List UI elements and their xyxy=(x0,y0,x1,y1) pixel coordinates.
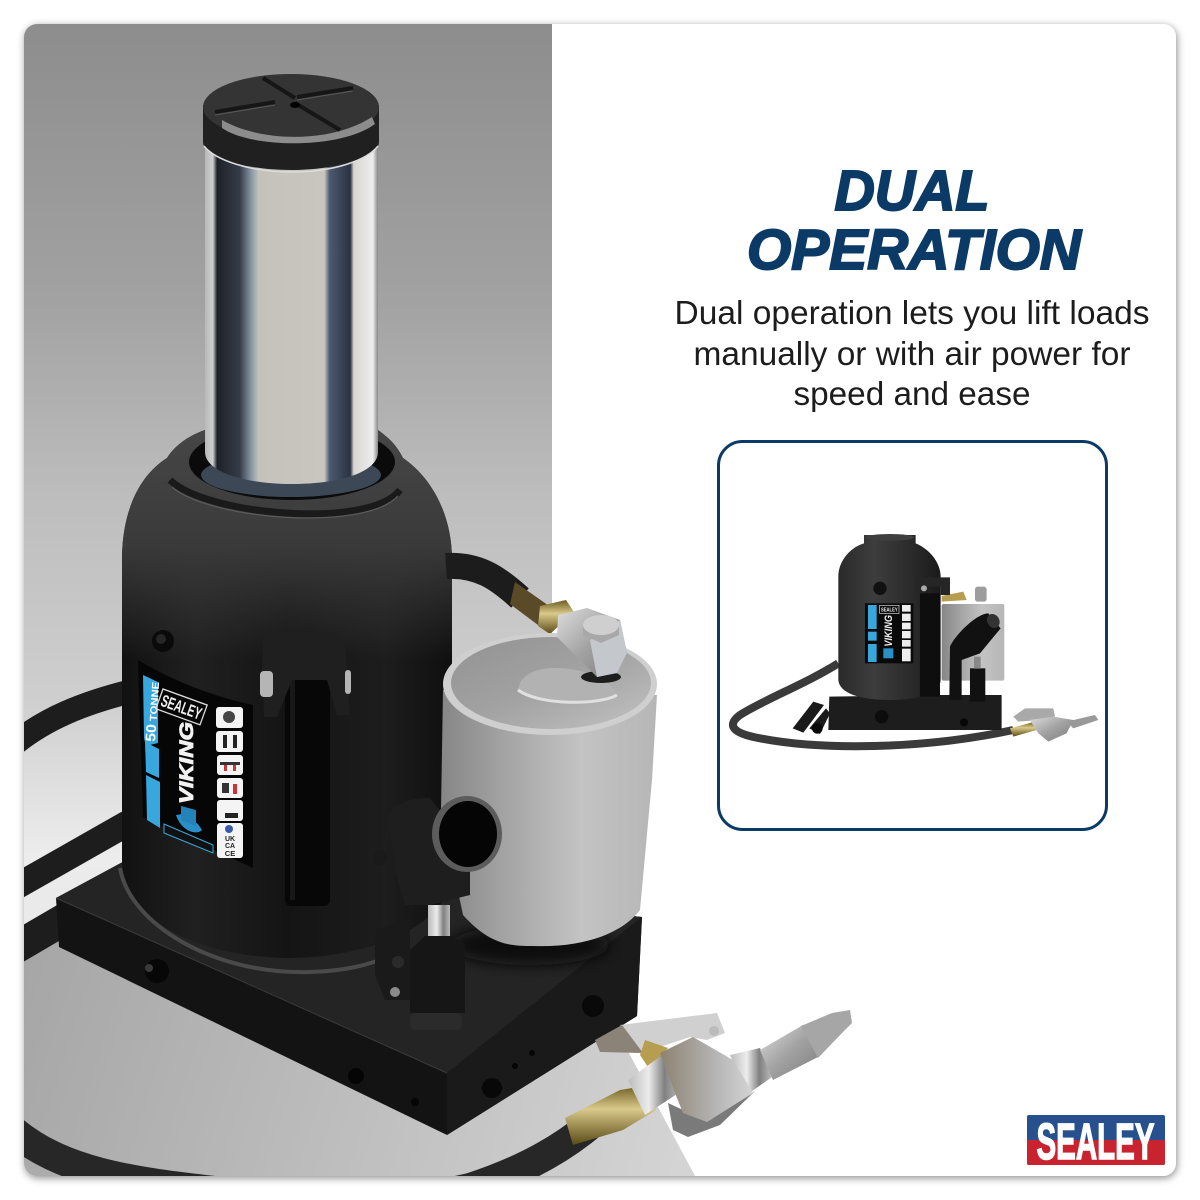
inset panel xyxy=(718,442,1106,830)
Sealey label badge: SEALEY xyxy=(158,691,205,724)
capacity text: 50 TONNE xyxy=(142,681,162,742)
inset top fitting xyxy=(942,587,987,602)
inset spare handle tubes xyxy=(793,702,830,734)
inset side handle socket xyxy=(917,577,950,697)
product label xyxy=(138,660,253,868)
handle socket xyxy=(260,632,351,906)
top hose and fittings xyxy=(446,566,574,634)
Sealey label badge xyxy=(156,689,207,725)
chrome ram xyxy=(205,140,378,484)
description text: manually or with air power for xyxy=(694,335,1131,372)
approval banner xyxy=(164,824,213,853)
Viking label text: VIKING xyxy=(177,722,198,804)
description text: Dual operation lets you lift loads xyxy=(674,294,1150,331)
viking ship icon xyxy=(176,806,202,832)
air hose behind jack xyxy=(12,692,128,950)
bottom air hose xyxy=(24,1120,599,1176)
saddle cap xyxy=(203,74,379,172)
pump assembly xyxy=(373,796,502,1030)
jack main body xyxy=(120,424,452,972)
label icons xyxy=(216,707,243,858)
product label: CA xyxy=(225,843,235,850)
blue capacity pills xyxy=(143,675,160,828)
inset tank xyxy=(942,604,1004,681)
inset label xyxy=(865,603,913,663)
floor xyxy=(24,941,695,1176)
description text xyxy=(674,294,1150,412)
inset air gun xyxy=(1010,708,1098,742)
heading: OPERATION xyxy=(747,218,1083,282)
inset pump xyxy=(949,612,1002,702)
product label: UK xyxy=(225,836,235,843)
air gun xyxy=(565,1010,852,1145)
inset label: VIKING xyxy=(883,615,895,647)
grey backdrop xyxy=(24,24,552,924)
inset hose xyxy=(733,663,1013,746)
quick-connect nozzle xyxy=(801,1010,852,1058)
gun body xyxy=(660,1037,753,1122)
lever xyxy=(595,1013,725,1070)
connector collar xyxy=(730,1048,772,1094)
inset body xyxy=(838,535,941,700)
heading xyxy=(747,159,1083,282)
description text: speed and ease xyxy=(794,375,1030,412)
brass ferrule xyxy=(565,1085,656,1145)
base plate xyxy=(56,858,642,1135)
chrome collar xyxy=(628,1055,680,1115)
inset label: SEALEY xyxy=(881,607,898,613)
heading: DUAL xyxy=(834,159,990,223)
product label: CE xyxy=(225,849,235,858)
inset jack photo xyxy=(733,534,1098,746)
inset base xyxy=(828,695,1002,730)
air reservoir tank xyxy=(441,633,657,946)
hex body xyxy=(760,1025,818,1080)
gun lower block xyxy=(668,1091,755,1137)
left photo panel xyxy=(10,24,852,1199)
banjo fitting xyxy=(557,608,627,683)
